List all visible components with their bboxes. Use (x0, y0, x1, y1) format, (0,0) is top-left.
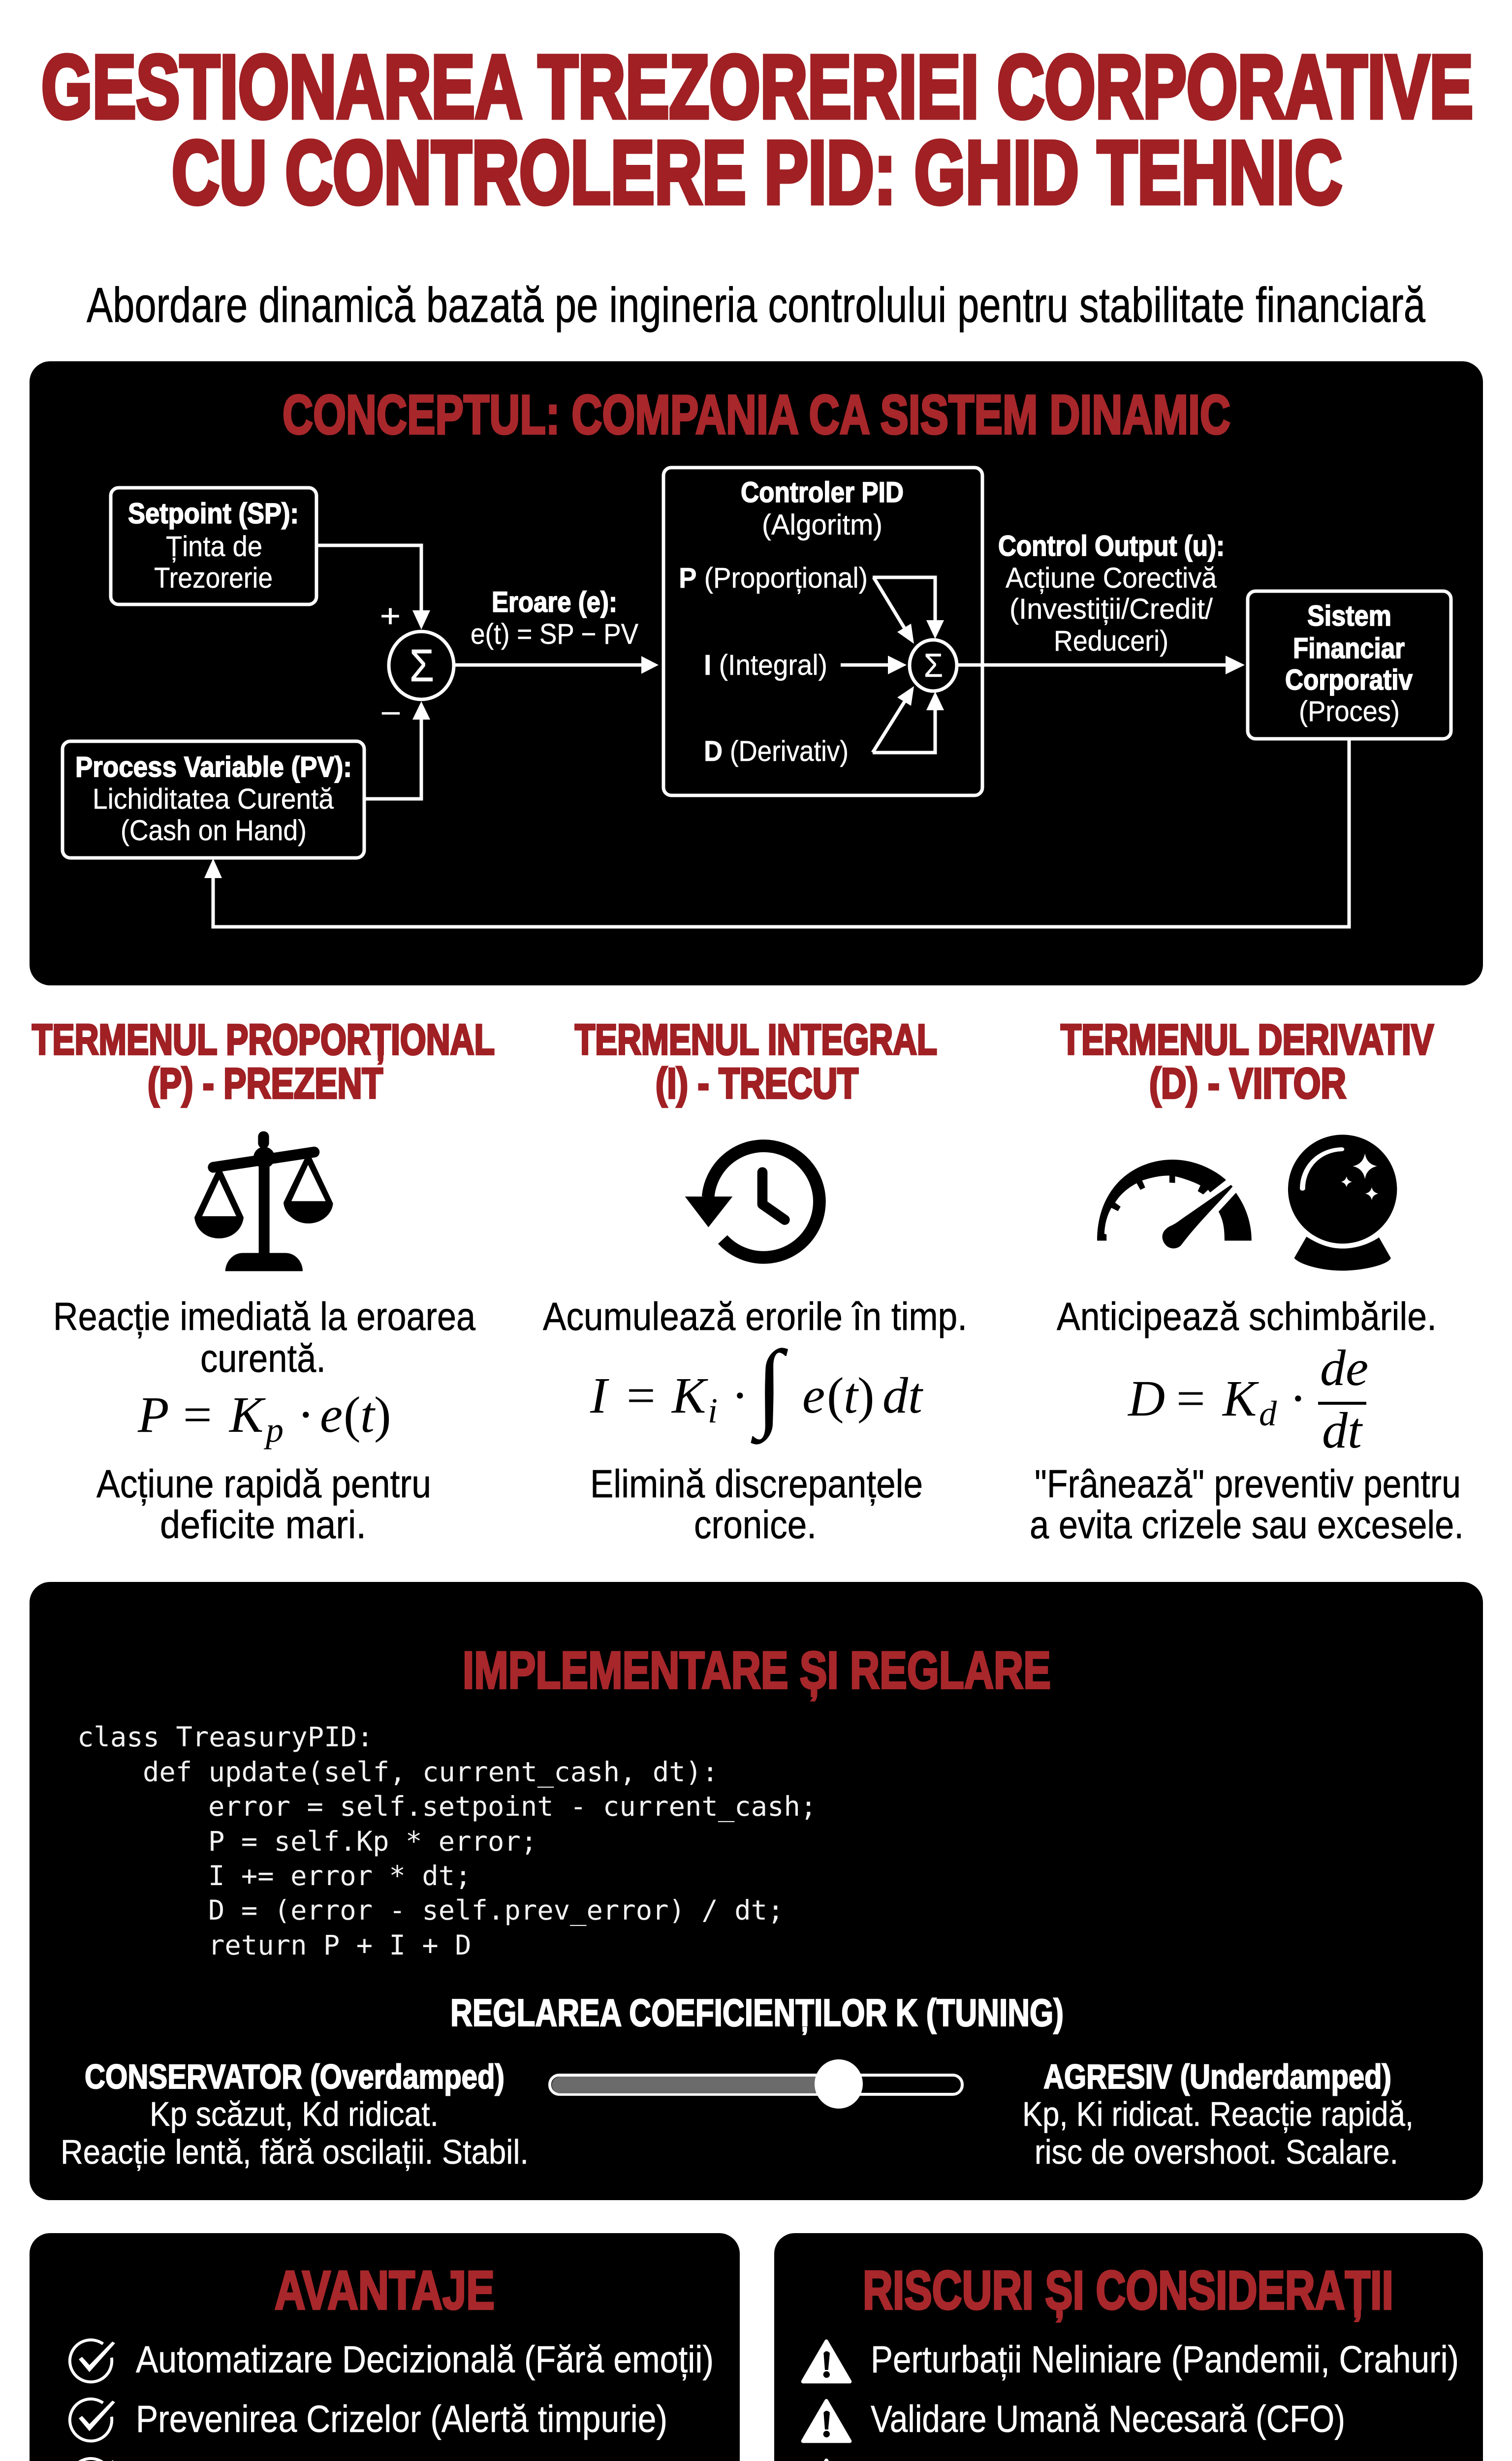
text: integral accumulation: Acumulează erorile în timp. (543, 1294, 967, 1338)
heading: implementation: IMPLEMENTARE ȘI REGLARE (463, 1641, 1051, 1701)
formula: derivative: = (1176, 1370, 1205, 1427)
summing junction: PID: Σ (924, 647, 943, 684)
subheading: tuning: REGLAREA COEFICIENȚILOR K (TUNING) (450, 1991, 1064, 2035)
box: corporate financial system (1248, 591, 1451, 739)
formula: proportional: ) (374, 1387, 391, 1443)
title (41, 36, 1473, 222)
code block: P = self.Kp * error; (208, 1826, 537, 1858)
icon: check 2 (70, 2399, 115, 2441)
heading: integral: TERMENUL INTEGRAL (575, 1016, 937, 1064)
text: integral elimination (590, 1462, 923, 1546)
text: integral elimination: cronice. (694, 1503, 817, 1546)
panel: risks (774, 2233, 1483, 2461)
text: aggressive: risc de overshoot. Scalare. (1035, 2133, 1398, 2171)
slider (550, 2059, 962, 2109)
summing junction: PID (910, 640, 957, 691)
sign: minus: – (382, 692, 400, 728)
icon: warning 2 (803, 2401, 850, 2441)
term: D: D (Derivativ) (704, 735, 849, 767)
formula: integral: ) (857, 1367, 875, 1424)
formula: proportional: K (228, 1387, 266, 1443)
box: corporate financial system: Corporativ (1285, 664, 1413, 696)
formula: integral: dt (882, 1367, 923, 1424)
icon: crystal ball (1288, 1135, 1397, 1271)
sign: plus: + (380, 598, 401, 634)
heading: derivative (1061, 1016, 1434, 1107)
formula: derivative: de (1320, 1340, 1368, 1396)
heading: proportional: TERMENUL PROPORȚIONAL (32, 1016, 495, 1064)
formula: derivative: · (1290, 1370, 1307, 1427)
arrow: control output (958, 656, 1245, 674)
formula: integral: K (671, 1367, 708, 1424)
panel: implementation and tuning (30, 1582, 1483, 2200)
box: setpoint: Trezorerie (154, 562, 273, 594)
arrow: setpoint to sum (316, 545, 430, 630)
column: derivative term (1030, 1016, 1464, 1546)
formula: integral: ( (827, 1367, 844, 1424)
summing junction: error (389, 631, 454, 699)
formula: proportional: · (297, 1387, 315, 1443)
formula: integral: i (708, 1391, 718, 1430)
icon: warning 1 (803, 2341, 850, 2382)
text: conservative: Kp scăzut, Kd ridicat. (150, 2095, 439, 2133)
term: P: P (Proporțional) (679, 562, 868, 594)
box: corporate financial system: (Proces) (1299, 695, 1400, 727)
box: PID controller: Controler PID (741, 476, 904, 508)
text: proportional action: Acțiune rapidă pentru (96, 1462, 431, 1506)
summing junction: error: Σ (410, 640, 434, 691)
arrow: feedback loop (204, 739, 1349, 927)
arrows: D to sum (873, 686, 944, 753)
text: proportional reaction: curentă. (200, 1336, 326, 1380)
label: control output: (Investiții/Credit/ (1009, 593, 1213, 625)
text: derivative braking (1030, 1462, 1464, 1546)
label: control output (998, 530, 1225, 657)
text: conservative (61, 2057, 529, 2171)
code block: class TreasuryPID: (77, 1721, 373, 1753)
box: PID controller (663, 468, 982, 795)
text: proportional action (96, 1462, 431, 1546)
label: control output: Acțiune Corectivă (1006, 562, 1217, 594)
label: control output: Control Output (u): (998, 530, 1225, 562)
formula: derivative: D (1127, 1370, 1165, 1427)
item: crisis prevention: Prevenirea Crizelor (Alertă timpurie) (136, 2398, 667, 2440)
formula: proportional: t (360, 1387, 376, 1443)
text: proportional reaction (53, 1294, 475, 1380)
formula: proportional: ( (344, 1387, 361, 1443)
label: control output: Reduceri) (1054, 625, 1168, 657)
formula: integral: I (590, 1367, 609, 1424)
box: setpoint: Ținta de (166, 531, 262, 563)
formula: derivative: dt (1322, 1402, 1363, 1459)
text: aggressive (1022, 2057, 1414, 2171)
formula: integral: t (844, 1367, 859, 1424)
text: proportional action: deficite mari. (160, 1503, 366, 1546)
label: error (471, 586, 638, 650)
text: aggressive: AGRESIV (Underdamped) (1043, 2057, 1391, 2096)
box: process variable: Lichiditatea Curentă (93, 783, 334, 815)
code block (77, 1721, 817, 1961)
heading: integral: (I) - TRECUT (656, 1060, 858, 1107)
item: decision automation: Automatizare Decizională (Fără emoții) (136, 2338, 714, 2381)
text: derivative anticipation: Anticipează schimbările. (1057, 1294, 1437, 1338)
text: derivative braking: "Frânează" preventiv pentru (1035, 1462, 1461, 1506)
formula: integral: = (627, 1367, 656, 1424)
text: proportional reaction: Reacție imediată la eroarea (53, 1294, 475, 1338)
arrow: I to sum (841, 656, 907, 674)
box: corporate financial system: Sistem (1307, 600, 1391, 632)
arrows: P to sum (873, 577, 944, 644)
item: human validation: Validare Umană Necesară (CFO) (871, 2398, 1345, 2440)
icon: check 1 (70, 2340, 115, 2382)
term: I: I (Integral) (704, 649, 827, 681)
formula: integral: e (802, 1367, 825, 1424)
label: error: Eroare (e): (492, 586, 617, 618)
heading: concept: CONCEPTUL: COMPANIA CA SISTEM DINAMIC (283, 384, 1230, 445)
arrow: error to controller (454, 656, 659, 674)
formula: derivative (1127, 1340, 1368, 1459)
icon: balance scale (194, 1131, 333, 1271)
box: process variable: Process Variable (PV): (75, 751, 352, 783)
arrow: process variable to sum (364, 701, 430, 799)
text: conservative: Reacție lentă, fără oscilații. Stabil. (61, 2133, 529, 2171)
text: conservative: CONSERVATOR (Overdamped) (85, 2057, 504, 2096)
code block: D = (error - self.prev_error) / dt; (208, 1894, 784, 1926)
box: process variable: (Cash on Hand) (121, 815, 307, 847)
formula: integral: ∫ (751, 1331, 788, 1445)
box: setpoint: Setpoint (SP): (128, 498, 299, 530)
code block: error = self.setpoint - current_cash; (208, 1791, 817, 1823)
formula: proportional: e (320, 1387, 343, 1443)
icon: speedometer (1097, 1160, 1252, 1248)
label: error: e(t) = SP − PV (471, 618, 638, 650)
text: integral elimination: Elimină discrepanțele (590, 1462, 923, 1506)
formula: derivative: K (1222, 1370, 1259, 1427)
panel: concept (30, 361, 1483, 985)
formula: integral: · (731, 1367, 749, 1424)
formula: proportional: = (183, 1387, 212, 1443)
code block: I += error * dt; (208, 1860, 472, 1892)
formula: proportional: P (137, 1387, 169, 1443)
box: corporate financial system: Financiar (1293, 632, 1405, 664)
heading: proportional: (P) - PREZENT (148, 1060, 383, 1107)
formula: derivative: d (1259, 1394, 1277, 1433)
column: proportional term (32, 1016, 495, 1546)
heading: integral (575, 1016, 937, 1107)
text: derivative braking: a evita crizele sau excesele. (1030, 1503, 1464, 1546)
icon: check 3 (70, 2459, 115, 2461)
heading: advantages: AVANTAJE (275, 2260, 495, 2321)
box: setpoint (111, 488, 316, 604)
box: process variable (63, 741, 364, 858)
text: aggressive: Kp, Ki ridicat. Reacție rapidă, (1022, 2095, 1414, 2133)
heading: derivative: (D) - VIITOR (1149, 1060, 1346, 1107)
formula: proportional: p (263, 1410, 284, 1450)
code block: return P + I + D (208, 1929, 472, 1961)
icon: clock with reverse arrow (685, 1146, 819, 1258)
code block: def update(self, current_cash, dt): (143, 1756, 718, 1788)
heading: proportional (32, 1016, 495, 1107)
box: PID controller: (Algoritm) (762, 509, 882, 541)
panel: advantages (30, 2233, 740, 2461)
column: integral term (543, 1016, 967, 1546)
